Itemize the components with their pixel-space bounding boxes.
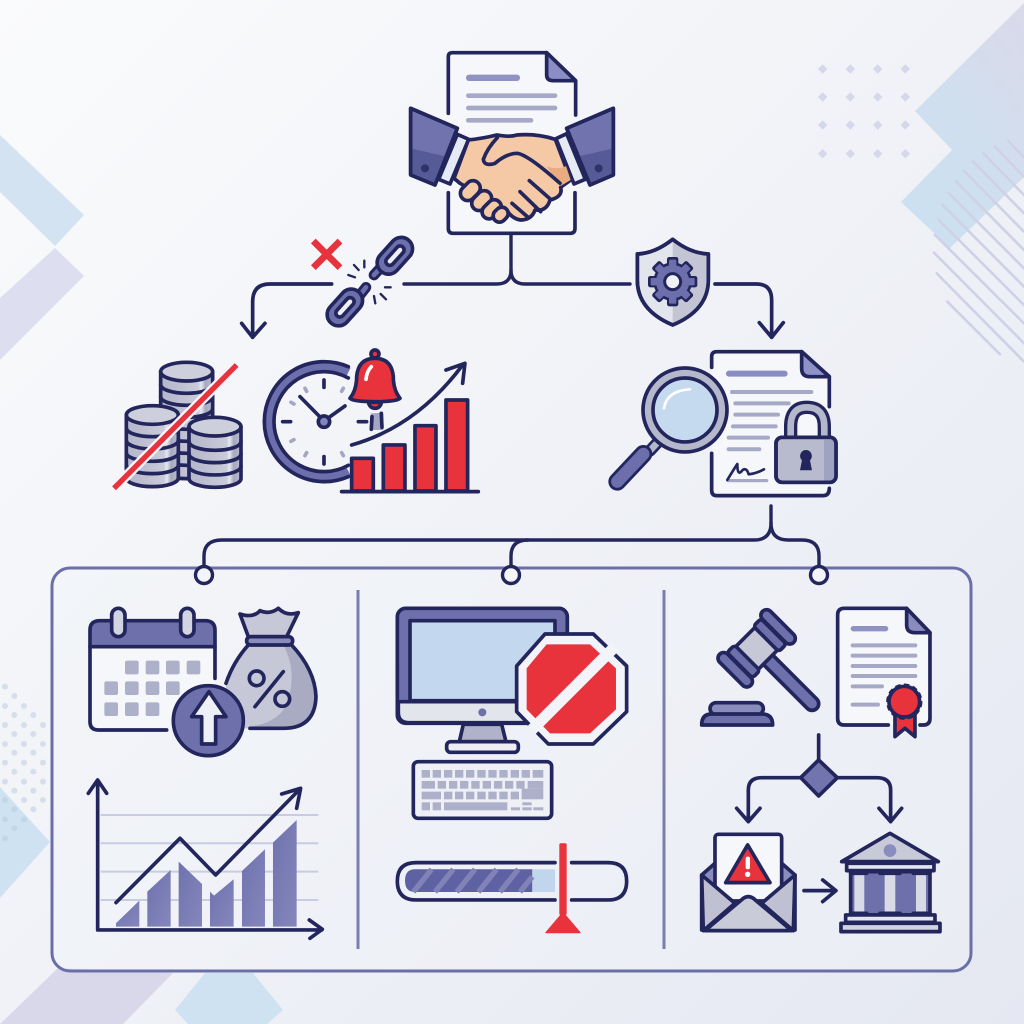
left sleeve [411, 108, 469, 185]
background decoration: left shapes [0, 135, 84, 898]
connector nodes [196, 566, 828, 584]
icon: padlock [776, 407, 836, 482]
panel column: legal and notification [702, 607, 940, 932]
icon: coin stacks [126, 362, 241, 487]
icon: money bag with percent [226, 608, 316, 728]
icon: up arrow badge [173, 686, 243, 756]
arrow: envelope to bank [804, 880, 836, 902]
background decoration: bottom shapes [0, 968, 283, 1024]
icon: calendar [90, 608, 215, 730]
icon: keyboard [413, 762, 552, 818]
icon: stop sign [517, 634, 627, 744]
background decoration: top right shapes [818, 3, 1024, 362]
right sleeve [556, 108, 613, 185]
icon: stopped progress bar [397, 843, 627, 933]
icon: certificate document [838, 608, 930, 737]
icon: alarm bell [350, 350, 400, 430]
line and bar chart [88, 780, 322, 938]
icon: monitor [397, 608, 567, 752]
right branch: shield, arrow and secured document [617, 239, 836, 496]
arrow: left branch [242, 284, 332, 337]
arrow: right branch [715, 284, 783, 337]
icon: magnifying glass [617, 368, 727, 482]
panel column: blocked system [397, 608, 627, 933]
icon: warning envelope [702, 834, 795, 931]
icon: clock [264, 362, 367, 482]
flow decision with two arrows [737, 735, 902, 822]
icon: shield with gear [637, 239, 708, 325]
panel: bottom container [52, 568, 971, 971]
secured document [712, 352, 829, 496]
panel column: interest and growth [88, 608, 322, 938]
connector: top trunk and branches [404, 235, 630, 284]
connector: document to three panels [204, 506, 819, 567]
icon: broken chain [323, 233, 417, 331]
bar chart: rising red bars [342, 363, 478, 492]
icon: red cross [313, 241, 340, 268]
clasped hands [454, 135, 571, 225]
red slash over coins [114, 365, 237, 488]
icon: bank [841, 833, 940, 932]
contract page [448, 53, 576, 233]
icon: contract with handshake [411, 53, 613, 233]
icon: gavel [702, 607, 842, 734]
left branch: broken chain, coins, clock, bell and bars [114, 233, 478, 492]
